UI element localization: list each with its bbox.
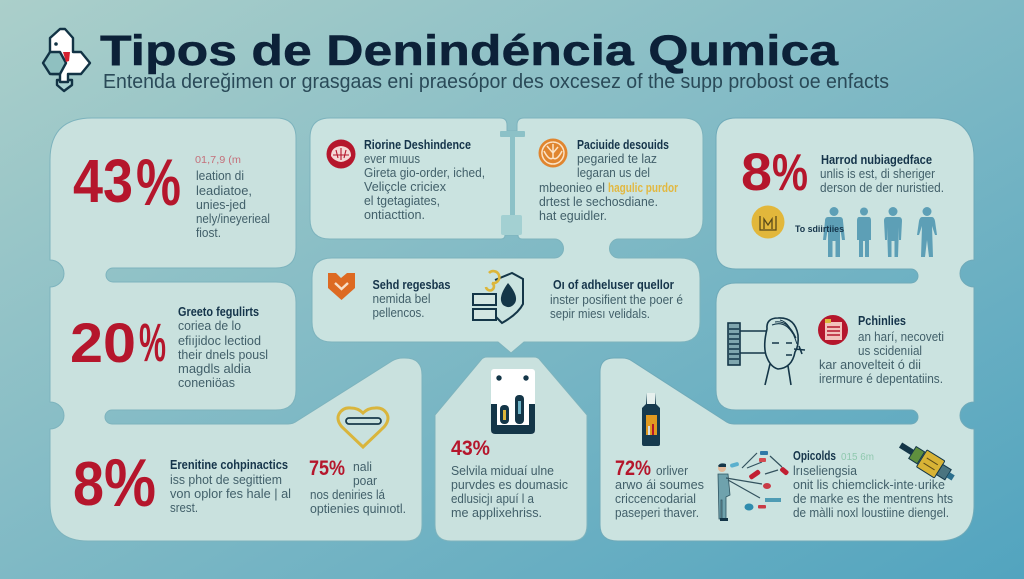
heading: Opicolds: [793, 449, 836, 463]
stat block: 8% lower left: [73, 445, 291, 521]
description: von oplor fes hale | al: [170, 487, 291, 501]
description: poar: [353, 474, 377, 488]
description: de màlli noxl loustiine diengel.: [793, 506, 949, 520]
description: purvdes es doumasic: [451, 478, 568, 492]
description: [550, 293, 683, 321]
stat block: 43% centre: [451, 369, 568, 520]
stat value 8%: %: [772, 144, 808, 202]
stat value 20%: 20: [70, 311, 136, 374]
stat value 43%: %: [136, 145, 181, 219]
heading: Pchinlies: [858, 314, 906, 328]
description: leadiatoe,: [196, 184, 252, 198]
panel shape: right column: [600, 118, 974, 541]
heading: Harrod nubiagedface: [821, 153, 932, 167]
stat value 8%: [741, 143, 808, 202]
heading: Oı of adheluser quellor: [553, 278, 674, 292]
description: iss phot de segittiem: [170, 473, 282, 487]
description: magdls aldia: [178, 362, 251, 376]
panel shape: left column: [50, 118, 422, 541]
stat value 8%: [73, 445, 156, 521]
description: de marke es the mentrens hts: [793, 492, 953, 506]
heading: Paciuide desouids: [577, 138, 669, 152]
description: orliver: [656, 464, 688, 478]
stat value 43%: 43%: [451, 437, 490, 460]
description: leation di: [196, 169, 244, 183]
icon: head with connector: [728, 318, 805, 385]
title: Tipos de Denindéncia Qumica: [100, 27, 839, 75]
description: [793, 464, 953, 520]
icon: logo: [43, 29, 90, 91]
caption: To sdiirtiies: [795, 224, 844, 234]
icon: bottle: [642, 393, 660, 446]
description: pellencos.: [372, 306, 424, 320]
card: Opicolds: [718, 437, 958, 521]
description: irermure é depentatiins.: [819, 372, 943, 386]
description: Veliçcle criciex: [364, 180, 447, 194]
icon: syringe and vial: [895, 437, 958, 486]
description: unies-jed: [196, 198, 246, 212]
icon: yellow chart badge: [752, 206, 784, 238]
card: middle centre: [328, 271, 683, 323]
description: kar anovelteit ó dii: [819, 358, 921, 372]
description: coneniöas: [178, 376, 235, 390]
description: [820, 167, 944, 195]
icon: vials device: [491, 369, 535, 434]
small note: 01,7,9 (m: [195, 155, 241, 166]
description: an harí, necoveti: [858, 330, 944, 344]
stat value 43%: 43: [73, 147, 133, 215]
illustration: person with substances: [718, 451, 789, 521]
stat value 8%: 8: [741, 143, 772, 202]
icon: shield with drop: [473, 271, 523, 323]
description: nos deniries lá: [310, 488, 385, 502]
heading: Riorine Deshindence: [364, 138, 471, 152]
icon: people: [823, 207, 937, 257]
stat value 8%: 8: [73, 450, 104, 519]
heading: Greeto fegulirts: [178, 305, 259, 319]
description: Selvila miduaí ulne: [451, 464, 554, 478]
description: [819, 330, 944, 386]
description: srest.: [170, 501, 198, 515]
description: efiıjidoc lectiod: [178, 334, 261, 348]
description: us scidenıial: [858, 344, 922, 358]
icon: heart: [338, 408, 388, 447]
description: arwo ái soumes: [615, 478, 704, 492]
connector between top panels: [500, 131, 525, 235]
description: drtest le sechosdiane.: [539, 195, 658, 209]
stat block: 43%: [73, 145, 270, 240]
description: [196, 169, 270, 240]
description: fiost.: [196, 226, 221, 240]
description: [372, 292, 430, 320]
card: Pchinlies: [728, 314, 944, 386]
card: Riorine Deshindence: [326, 138, 485, 222]
stat value 43%: [73, 145, 181, 219]
description: nali: [353, 460, 372, 474]
description: edlusicjı apuí l a: [451, 492, 534, 506]
description: ontiacttion.: [364, 208, 425, 222]
description: me applixehriss.: [451, 506, 542, 520]
description: ever mıuus: [364, 152, 420, 166]
description: [170, 473, 291, 515]
description: unlis is est, di sheriger: [820, 167, 935, 181]
description: nely/ineyerieal: [196, 212, 270, 226]
icon: brain: [326, 140, 356, 168]
card: Paciuide desouids: [538, 138, 678, 223]
icon: red document badge: [818, 315, 848, 345]
icon: orange badge: [328, 273, 355, 300]
description: nemida bel: [372, 292, 430, 306]
description: el tgetagiates,: [364, 194, 440, 208]
description: [615, 464, 704, 520]
description: legaran us del: [577, 166, 650, 180]
description: hat eguidler.: [539, 209, 607, 223]
description: Gireta gio-order, iched,: [364, 166, 485, 180]
description: [451, 464, 568, 520]
stat block: 75% with heart: [309, 408, 406, 516]
stat block: 72% with bottle: [615, 393, 704, 520]
description: onit lis chiemclick-inte·urike: [793, 478, 945, 492]
description: hagulic purdor: [608, 181, 678, 195]
description: paseperi thaver.: [615, 506, 699, 520]
stat value 20%: [70, 311, 166, 374]
stat value 8%: %: [104, 445, 156, 521]
description: [310, 460, 406, 516]
description: [364, 152, 485, 222]
description: coriea de lo: [178, 319, 241, 333]
description: their dnels pousl: [178, 348, 268, 362]
small note: 015 6m: [841, 452, 874, 463]
panel shape: top centre and middle centre: [310, 118, 703, 353]
icon: orange circle: [538, 138, 568, 168]
stat value 72%: 72%: [615, 457, 651, 480]
stat block: 20%: [70, 305, 268, 390]
description: criccencodarial: [615, 492, 696, 506]
description: derson de der nuristied.: [820, 181, 944, 195]
description: inster posifient the poer é: [550, 293, 683, 307]
description: [178, 319, 268, 390]
panel shape: bottom centre: [435, 357, 587, 541]
heading: Erenitine cohpinactics: [170, 458, 288, 472]
description: optienies quinıotl.: [310, 502, 406, 516]
description: sepir miesı velidals.: [550, 307, 650, 321]
card: 8% with people: [741, 143, 944, 257]
stat value 75%: 75%: [309, 457, 345, 480]
description: mbeonieo el: [539, 181, 605, 195]
stat value 20%: %: [139, 313, 166, 373]
description: lrıseliengsia: [793, 464, 857, 478]
description: pegaried te laz: [577, 152, 657, 166]
heading: Sehd regesbas: [372, 278, 451, 292]
description: [539, 152, 678, 223]
subtitle: Entenda dereğimen or grasgaas eni praesópor des oxcesez of the supp probost oe enfacts: [103, 71, 889, 93]
